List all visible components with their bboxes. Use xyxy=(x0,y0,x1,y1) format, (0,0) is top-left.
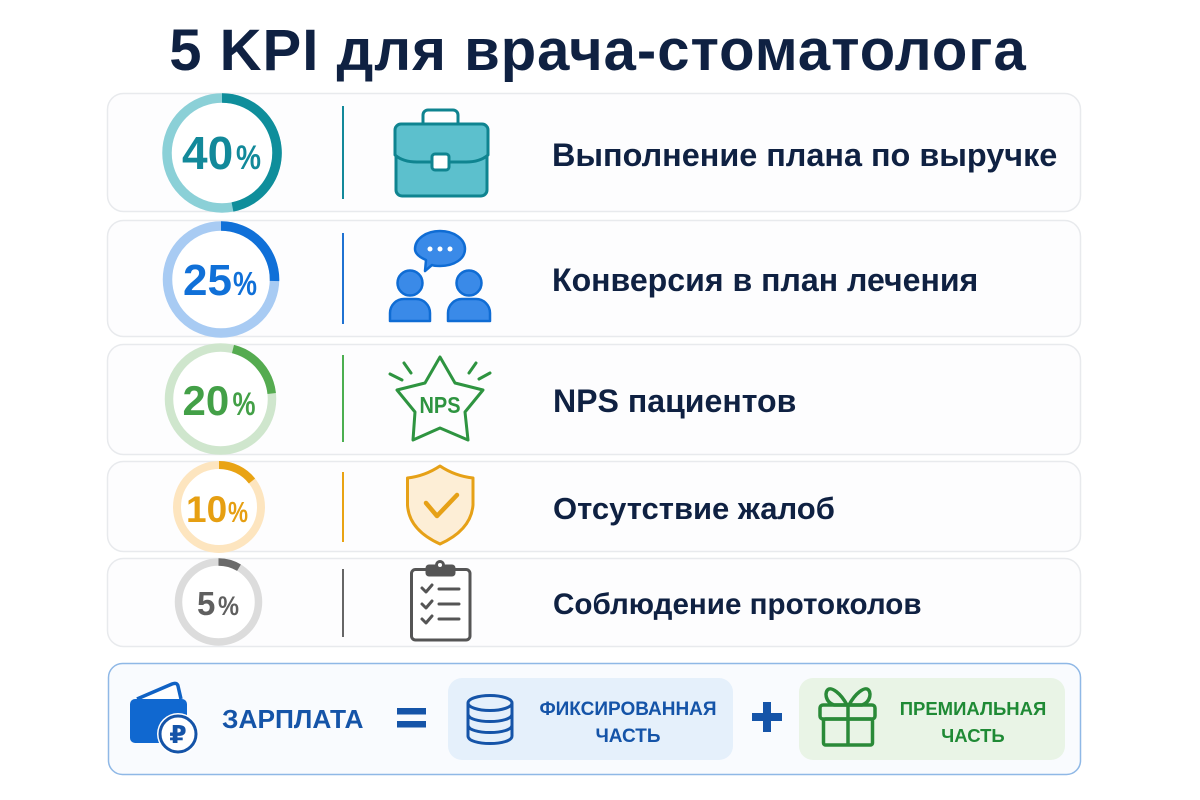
icon: NPS star: NPS xyxy=(420,392,460,418)
label: salary: ЗАРПЛАТА xyxy=(222,704,363,734)
ring: 5%: 5 xyxy=(197,585,215,622)
ring: 5% xyxy=(178,562,258,642)
icon: patients conversation xyxy=(390,231,490,321)
ring: 25%: 25 xyxy=(183,256,232,305)
label: Выполнение плана по выручке xyxy=(552,137,1057,173)
icon: gift xyxy=(820,689,875,745)
panel: KPI 20% NPS xyxy=(108,344,1080,454)
box: bonus part: ЧАСТЬ xyxy=(941,725,1005,746)
label: Отсутствие жалоб xyxy=(553,491,835,526)
panel: salary formula xyxy=(108,664,1080,774)
label: bonus part: ПРЕМИАЛЬНАЯ xyxy=(900,698,1046,719)
title: 5 KPI для врача-стоматолога xyxy=(169,18,1027,83)
ring: 20%: % xyxy=(232,386,256,422)
label: Соблюдение протоколов xyxy=(553,588,922,621)
icon: equals sign xyxy=(397,708,426,728)
ring: 5%: % xyxy=(218,591,239,621)
ring: 25%: % xyxy=(233,265,257,302)
ring: 25% xyxy=(168,226,275,333)
ring: 10%: 10 xyxy=(186,489,227,530)
panel: KPI 40% revenue plan xyxy=(108,94,1080,212)
ring: 10% xyxy=(177,465,261,549)
box: bonus part xyxy=(799,678,1065,760)
icon: coin stack xyxy=(468,696,512,744)
icon: plus sign xyxy=(752,702,782,732)
icon: NPS star xyxy=(390,357,490,440)
icon: shield with check xyxy=(408,466,473,544)
icon: clipboard checklist xyxy=(412,562,470,640)
label: fixed part: ФИКСИРОВАННАЯ xyxy=(539,699,717,720)
panel: KPI 5% protocols xyxy=(108,558,1080,646)
label: NPS пациентов xyxy=(553,383,796,419)
ring: 40%: % xyxy=(236,139,261,177)
ring: 10%: % xyxy=(228,497,248,529)
panel: KPI 25% conversion xyxy=(108,220,1080,336)
ring: 20%: 20 xyxy=(182,377,229,424)
ring: 40%: 40 xyxy=(182,127,233,179)
ring: 40% xyxy=(167,98,277,208)
icon: briefcase xyxy=(395,110,488,196)
ring: 20% xyxy=(169,348,272,450)
panel: KPI 10% no complaints xyxy=(108,462,1080,552)
label: Конверсия в план лечения xyxy=(552,262,978,298)
icon: wallet with ruble coin: ₽ xyxy=(169,721,187,749)
icon: wallet with ruble coin xyxy=(130,683,199,755)
box: fixed part xyxy=(448,678,733,760)
box: fixed part: ЧАСТЬ xyxy=(595,726,661,747)
